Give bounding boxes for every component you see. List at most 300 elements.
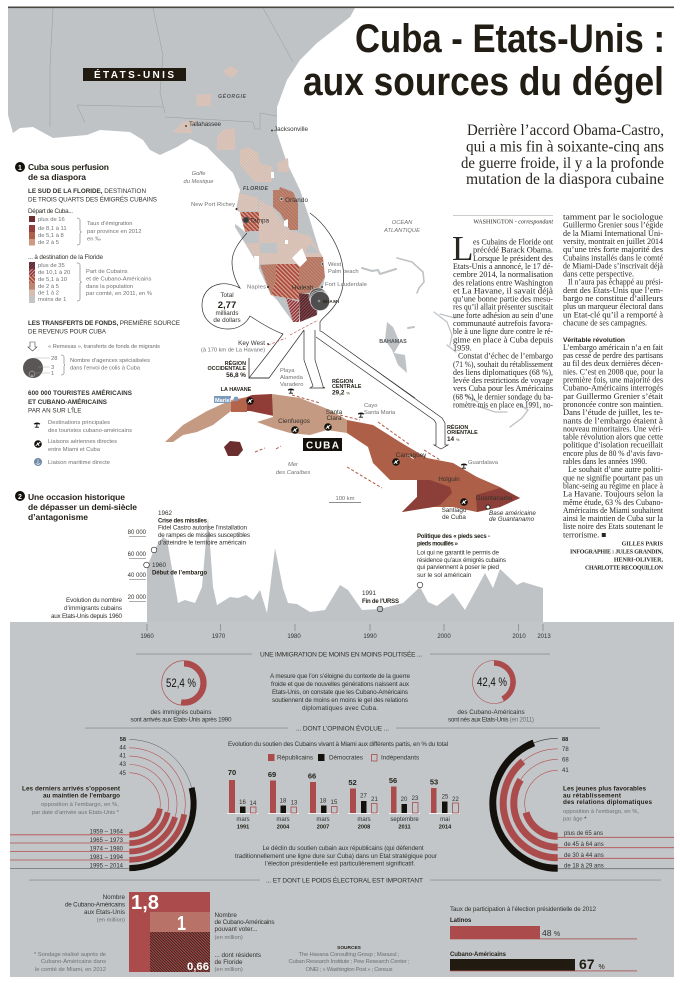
legend: tourism icons: des touristes cubano-américains [48, 428, 132, 434]
map: United States and Florida [8, 8, 355, 322]
footnote: le comté de Miami, en 2012 [35, 967, 106, 973]
donut chart: 52,4 %: 52,4 % [166, 678, 196, 690]
proportional circles legend: 1 [51, 371, 54, 377]
drop cap: L [452, 229, 473, 268]
donut chart: 42,4 %: des Cubano-Américains [457, 709, 525, 716]
chart caption [51, 597, 122, 620]
period labels: 1974 – 1980 [90, 846, 124, 852]
map labels: north Florida: New Port Richey [191, 202, 235, 208]
map dots and labels: south Florida [213, 219, 420, 345]
heading 2: de dépasser un demi-siècle [28, 502, 137, 512]
article: first column: vers Cuba pour les Américains [453, 384, 553, 393]
annotation: 1960: Début de l’embargo [152, 570, 207, 576]
article: second column: que ne signifie pourtant pas un [563, 473, 664, 482]
Cuba city labels, airports and ports: de Guantanamo [489, 516, 535, 523]
sub heading: transfers: LES TRANSFERTS DE FONDS, PREMIÈRE SOURCE [28, 318, 180, 327]
article: second column: Américains de Miami souhaitent [563, 506, 664, 515]
x axis labels: 2010 [512, 634, 526, 640]
labels right: de Floride [214, 959, 243, 966]
value labels: 78 [562, 747, 569, 753]
article: second column: HENRI-OLIVIER, [614, 558, 663, 564]
group: mars 2008: 52 [348, 778, 357, 787]
Cuba city labels, airports and ports: Holguin [438, 476, 460, 483]
article: first column: levée des restrictions de voyage [453, 376, 553, 385]
map dots and labels: south Florida: Fort Lauderdale [325, 282, 367, 288]
group: mars 2007: mars [316, 817, 330, 823]
group: mars 2007: 15 [331, 800, 338, 806]
legend: tourism icons: entre Miami et Cuba [48, 447, 101, 453]
group: mai 2014: 25 [442, 794, 449, 800]
chart caption: aux Etats-Unis depuis 1960 [51, 613, 122, 620]
sub heading: transfers [28, 318, 180, 336]
heading 2: d’antagonisme [28, 512, 88, 522]
label: CUBA [303, 438, 342, 452]
sub heading: Floride [28, 188, 157, 204]
text: immigration paragraph: froide et que de nouvelles générations naissent aux [271, 681, 410, 688]
legend: tourism icons: Liaison maritime directe [48, 460, 110, 466]
chart caption: Evolution du nombre [66, 597, 122, 604]
chart title left: par date d’arrivée aux Etats-Unis * [32, 810, 120, 816]
Cuba city labels, airports and ports: Santiago [442, 507, 467, 514]
annotation: 1962: de rampes de missiles susceptibles [158, 532, 250, 539]
article: second column: première fois, une majorité des [563, 376, 663, 384]
annotation: 1991: Fin de l’URSS [362, 599, 399, 605]
proportional circles legend: Nombre d’agences spécialisées [70, 358, 150, 364]
legend: destination: de 10,1 à 20 [38, 270, 70, 276]
group: mars 2004: 69 [268, 770, 276, 779]
annotation: 1960 [144, 562, 207, 576]
article: first column: précédé Barack Obama. [473, 246, 553, 255]
x axis labels: 1960 [140, 634, 154, 640]
article: second column: terrorisme. ■ [563, 530, 606, 539]
map labels: north Florida: Orlando [285, 197, 308, 204]
y axis labels: 60 000 [128, 552, 147, 558]
group: septembre 2011: 20 [401, 797, 408, 803]
map labels: north Florida: Tampa [250, 218, 269, 224]
labels right: (en million) [214, 935, 243, 941]
provinces: centre [257, 394, 347, 435]
heading 2 [15, 491, 137, 522]
sub heading: Floride: DE TROIS QUARTS DES ÉMIGRÉS CUBAINS [28, 194, 157, 204]
legend: departure: de 2 à 5 [38, 240, 59, 246]
y axis labels: 80 000 [128, 530, 147, 536]
annotation: wet foot dry foot: Politique des « pieds secs - [417, 534, 490, 540]
Cuba city labels, airports and ports: Guantanamo [476, 495, 513, 502]
value labels: 58 [120, 737, 126, 743]
sub heading: tourists: ET CUBANO-AMÉRICAINS [28, 397, 107, 406]
bar chart: party support: Evolution du soutien des Cubains vivant à Miami aux différents partis, en % du total [228, 741, 448, 748]
province: Artemisa [231, 397, 247, 412]
Cuba city labels, airports and ports: de Cuba [442, 514, 466, 521]
y axis labels: 20 000 [128, 595, 147, 601]
x axis labels: 1980 [287, 634, 301, 640]
donut chart: 42,4 %: sont nés aux Etats-Unis (en 2011) [448, 716, 534, 724]
chart title right [563, 786, 652, 822]
map labels: north Florida: Golfe [192, 171, 206, 177]
article: second column: qu’une très forte majorité des [563, 245, 663, 254]
section header: opinion: ... DONT L’OPINION ÉVOLUE ... [296, 724, 389, 732]
article: second column: INFOGRAPHIE : JULES GRANDIN, [570, 550, 664, 556]
group: mars 2008: 21 [371, 797, 378, 803]
article: second column: par Guillermo Grenier s’était [563, 392, 664, 401]
bar chart: turnout: Taux de participation à l’élection présidentielle de 2012 [450, 906, 596, 913]
map: Cuba [165, 394, 520, 512]
map dots and labels: south Florida: Palm beach [328, 269, 359, 275]
chart caption: d’immigrants cubains [64, 605, 122, 612]
article: second column: bargo ne constitue d’ailleurs [563, 294, 663, 303]
article: second column: chacune de ses campagnes. [563, 318, 647, 327]
proportional circles legend [23, 355, 150, 378]
legend: departure: de 5,1 à 8 [38, 233, 64, 239]
map label: ÉTATS-UNIS: ÉTATS-UNIS [94, 68, 174, 81]
sub heading: Floride: LE SUD DE LA FLORIDE, DESTINATION [28, 188, 146, 195]
group: mars 2008: 27 [360, 794, 367, 800]
annotation: 1962 [151, 510, 250, 553]
subtitle: Derrière l’accord Obama-Castro, [467, 122, 664, 139]
arrow: Région centrale [304, 330, 325, 388]
Cuba city labels, airports and ports [201, 340, 536, 523]
Florida Keys [268, 320, 318, 345]
bar chart: turnout: Latinos [450, 918, 472, 924]
chart title left: opposition à l’embargo, en %, [41, 802, 119, 808]
labels left: de Cubano-Américains [65, 902, 125, 908]
heading 2: 2 [18, 494, 22, 501]
value labels [562, 737, 569, 774]
map: Bahamas islands [362, 258, 528, 427]
group: mars 1991: 14 [250, 801, 257, 807]
scale bar: 100 km [335, 496, 355, 502]
proportional circles legend: 3 [51, 365, 54, 371]
article: second column: Cubains installés dans le comté [563, 253, 663, 262]
group: septembre 2011 [389, 776, 419, 830]
article: first column: une forte adhésion au sein d’une [453, 311, 553, 320]
arc chart: embargo by arrival date [10, 737, 194, 870]
annotation: 1962: Fidel Castro autorise l’installation [158, 524, 247, 532]
Cuba city labels, airports and ports: (à 170 km de La Havane) [201, 348, 265, 354]
Cuba city labels, airports and ports: des Caraïbes [276, 470, 310, 476]
donut chart: 42,4 %: 42,4 % [477, 677, 507, 689]
Cuba city labels, airports and ports: Cayo [364, 403, 378, 409]
value labels: 45 [119, 771, 127, 777]
article: second column: Guillermo Grenier sous l’égide [563, 221, 663, 230]
subtitle: mutation de la diaspora cubaine [466, 171, 664, 188]
leader lines [10, 834, 129, 836]
annotation: 1962: 1962 [158, 510, 173, 517]
value labels: 88 [562, 737, 568, 743]
article: first column: gime en place à Cuba depuis [453, 335, 553, 344]
labels left [65, 894, 125, 924]
Cuba city labels, airports and ports: Base américaine [489, 510, 536, 517]
Cuba city labels, airports and ports: Clara [326, 415, 342, 422]
Cuba city labels, airports and ports: 14 % [447, 436, 460, 443]
annotation: 1960: 1960 [152, 562, 167, 569]
donut chart: 52,4 % [130, 661, 232, 724]
article: first column: Lorsque le président des [473, 254, 553, 263]
group: mars 2008: mars [357, 817, 371, 823]
chart title right: opposition à l’embargo, en %, [563, 809, 639, 815]
value labels: 43 [119, 762, 127, 768]
annotation: wet foot dry foot: Loi qui ne garantit le permis de [417, 550, 499, 556]
article: second column: nants de l’embargo étaient à [563, 416, 663, 425]
article: second column: rables dans les années 1990. [563, 457, 647, 466]
article: first column: (71 %), souhait du rétablissement [453, 360, 554, 369]
value labels: 41 [562, 768, 569, 774]
annotation: 1962: Crise des missiles [158, 518, 208, 524]
labels left: (en million) [97, 918, 125, 924]
labels left: Nombre [103, 894, 125, 901]
article: second column: dent des Etats-Unis que l’em- [563, 286, 663, 295]
x axis labels [140, 624, 551, 640]
article: first column: ble à une ligne dure contre le ré- [453, 327, 553, 336]
footnote: * Sondage réalisé auprès de [34, 952, 106, 958]
legend: destination: moins de 1 [38, 297, 66, 303]
group: mars 2004: mars [276, 817, 290, 823]
chart title right: par âge * [563, 816, 587, 822]
footnote: Cubano-Américains dans [41, 959, 106, 965]
group: mai 2014: 53 [430, 778, 438, 786]
sources: Cuban Research Institute ; Pew Research Center ; [288, 959, 410, 965]
article: second column: L’embargo américain n’a en fait [563, 343, 664, 352]
article: second column: Le souhait d’une autre politi- [568, 465, 663, 474]
bar chart: turnout [450, 906, 637, 972]
group: mars 2007: 66 [308, 772, 316, 780]
x axis labels: 2000 [437, 634, 451, 640]
legend: departure: de 8,1 à 11 [38, 226, 67, 232]
article: second column: blanc-seing au régime en place à [563, 481, 663, 490]
article: second column: La Havane. Toujours selon la [563, 490, 663, 499]
article: first column: communauté autrefois favora- [453, 319, 553, 328]
sources: SOURCES [337, 945, 362, 951]
map labels: north Florida: du Mexique [184, 179, 214, 185]
text: immigration paragraph: Etats-Unis, on constate que les Cubano-Américains [272, 689, 408, 696]
group: mars 2008 [348, 778, 378, 830]
article: second column: versity, montrait en juillet 2014 [563, 237, 664, 246]
legend: destination [28, 254, 152, 303]
province: Guantánamo [476, 488, 520, 512]
legend: destination: dans la population [86, 284, 133, 290]
annotation: wet foot dry foot: résidence qu’aux émigrés cubains [417, 557, 506, 564]
sub heading: tourists: PAR AN SUR L’ÎLE [28, 406, 81, 414]
heading 1: de sa diaspora [28, 172, 86, 182]
group: mars 2007: 2007 [317, 824, 329, 830]
map labels: north Florida: FLORIDE [243, 186, 269, 192]
legend: departure [28, 208, 141, 246]
legend: destination: Part de Cubains [86, 269, 128, 275]
legend: destination: et de Cubano-Américains [86, 276, 152, 282]
legend: Républicains [277, 754, 313, 762]
map dots and labels: south Florida: milliards [215, 310, 239, 317]
panel: Cuba sous perfusion legend [15, 162, 180, 466]
bar chart: turnout: Cubano-Américains [450, 952, 507, 958]
article: second column: encore plus de 80 % d’avis favo- [563, 449, 663, 458]
arc chart: embargo by age [493, 737, 674, 870]
area chart: Cuban immigrants [51, 510, 551, 640]
y axis labels: 40 000 [128, 573, 147, 579]
legend: departure: Départ de Cuba... [28, 208, 73, 215]
group: mai 2014: mai [440, 817, 450, 823]
baselines [227, 812, 460, 814]
article: second column: ainsi le maintien de Cuba sur la [563, 514, 663, 523]
group: mars 2004: 13 [291, 800, 298, 806]
y axis labels [128, 530, 147, 602]
Cuba city labels, airports and ports: Mariel [215, 398, 232, 404]
annotation: 1991: 1991 [362, 590, 377, 597]
text: immigration paragraph: diplomatiques avec Cuba. [302, 705, 378, 712]
legend: tourism icons: Destinations principales [48, 420, 110, 426]
article: second column: dans cette perspective. [563, 270, 634, 279]
age labels: plus de 65 ans [564, 831, 603, 837]
article: second column: tamment par le sociologue [563, 212, 663, 222]
chart title right: Les jeunes plus favorables [563, 786, 646, 792]
map dots and labels: south Florida: MIAMI [323, 299, 339, 304]
legend: departure: Taux d’émigration [87, 221, 132, 227]
article: first column: des relations entre Washington [453, 278, 554, 287]
nested squares chart: voters: 0,66 [187, 961, 209, 973]
article: first column: Etats-Unis a annoncé, le 17 dé- [453, 262, 553, 271]
group: septembre 2011: 56 [389, 776, 397, 785]
period labels [90, 830, 124, 870]
map dots and labels: south Florida: OCÉAN [392, 219, 413, 226]
sources [288, 945, 410, 973]
group: mars 1991: 16 [239, 800, 246, 806]
map dots and labels: south Florida: Total [220, 292, 234, 299]
Isla de la Juventud [224, 441, 243, 456]
legend: Démocrates [329, 754, 363, 762]
group: mars 1991: 70 [228, 768, 236, 777]
byline: GILLES PARIS [622, 542, 664, 548]
top rule [8, 6, 674, 8]
arrow: Région occidentale [249, 358, 269, 378]
text: republican decline: Le déclin du soutien cubain aux républicains (qui défendent [262, 845, 424, 852]
Georgia and Florida emigration counties [173, 66, 325, 322]
text: republican decline: l’élection présidentielle est particulièrement significatif. [265, 860, 415, 868]
text: immigration paragraph [270, 673, 410, 712]
article: first column: et La Havane, il savait déjà [453, 286, 553, 295]
map dots and labels: south Florida: BAHAMAS [379, 339, 407, 345]
group: mars 2007: 18 [320, 798, 327, 804]
group: mars 1991: 1991 [237, 824, 249, 830]
legend: destination: plus de 35 [38, 263, 65, 269]
period labels: 1959 – 1964 [90, 830, 124, 836]
heading 1: Cuba sous perfusion [28, 162, 109, 172]
map dots and labels: south Florida: 2,77 [218, 300, 236, 311]
chart title left: au maintien de l’embargo [43, 792, 120, 800]
heading 1: 1 [18, 165, 22, 172]
leader lines [558, 837, 674, 858]
labels right: ... dont résidents [214, 952, 261, 959]
annotation: wet foot dry foot: pieds mouillés » [417, 542, 459, 548]
value labels: 68 [562, 758, 569, 764]
group: mars 1991: mars [236, 817, 250, 823]
Cuba city labels, airports and ports: RÉGION [332, 377, 353, 385]
map dots and labels: south Florida: Hialeah [292, 284, 314, 292]
annotation: 1962: d’atteindre le territoire américain [158, 540, 246, 546]
group: mars 2007 [308, 772, 338, 830]
legend: destination: de 5,1 à 10 [38, 277, 67, 283]
legend: departure: plus de 16 [38, 217, 65, 223]
labels left: aux Etats-Unis [84, 909, 125, 916]
legend: tourism icons [34, 420, 132, 466]
Cuba city labels, airports and ports: RÉGION [447, 423, 468, 431]
heading 1 [15, 162, 109, 182]
group: mai 2014: 22 [452, 797, 459, 803]
value labels: 44 [119, 746, 127, 752]
group: mars 2008: 2008 [358, 824, 370, 830]
group: septembre 2011: 2011 [398, 824, 411, 830]
bar chart: party support [227, 741, 460, 830]
provinces: east [347, 420, 520, 512]
x axis labels: 2013 [537, 634, 551, 640]
group: mars 1991 [228, 768, 257, 830]
Cuba city labels, airports and ports: 56,8 % [226, 372, 246, 379]
article: second column: Il n’aura pas échappé au prési- [568, 278, 663, 287]
article: first column: qu’une bonne partie des mesu- [453, 295, 553, 304]
group: mai 2014 [430, 778, 459, 830]
subtitle [461, 122, 664, 188]
title [303, 17, 665, 104]
article: first column: (68 %), le dernier sondage du ba- [453, 392, 553, 401]
legend: departure: en ‰ [87, 236, 101, 242]
Cuba city labels, airports and ports: RÉGION [225, 359, 246, 367]
Cuba city labels, airports and ports: Santa Maria [364, 410, 396, 416]
article: first column: Constat d’échec de l’embargo [458, 352, 553, 361]
map labels: north Florida: GÉORGIE [218, 92, 247, 100]
x axis labels: 1990 [363, 634, 377, 640]
Cuba city labels, airports and ports: CENTRALE [332, 384, 362, 390]
Cuba city labels, airports and ports: OCCIDENTALE [207, 366, 246, 372]
Cuba city labels, airports and ports: Guardalava [468, 460, 499, 466]
bar chart: turnout: 48 % [542, 928, 560, 938]
panel: Cuba sous perfusion legend: « Remesas », transferts de fonds de migrants [48, 344, 160, 350]
annotation: 1991 [362, 590, 399, 612]
article: second column: de Miami-Dade s’inscrivait déjà [563, 261, 663, 270]
map dots and labels: south Florida: de dollars [213, 317, 241, 324]
labels right: de Cubano-Américains [214, 919, 274, 926]
proportional circles legend: 28 [51, 356, 57, 362]
icon: remittance arrow [28, 342, 37, 351]
scale bar [329, 496, 361, 503]
period labels: 1995 – 2014 [90, 864, 124, 870]
age labels [564, 831, 604, 870]
value labels [119, 737, 127, 777]
Cuba city labels, airports and ports: Key West [238, 340, 265, 347]
legend: destination: ... à destination de la Floride [28, 254, 103, 261]
group: mars 2004: 18 [280, 798, 287, 804]
Cuba city labels, airports and ports: Camagüey [396, 452, 427, 459]
article: second column: Cubano-Américains interrogés [563, 384, 663, 393]
article: second column: au fil des deux dernières décen- [563, 359, 663, 368]
article: first column: cembre 2014, la normalisation [453, 270, 554, 279]
label: CUBA: CUBA [306, 440, 339, 452]
text: immigration paragraph: soutiennent de moins en moins le gel des relations [272, 697, 408, 704]
legend: tourism icons: Liaisons aériennes directes [48, 439, 117, 445]
annotation: wet foot dry foot [417, 534, 506, 588]
Cuba city labels, airports and ports: 29,2 % [332, 390, 350, 396]
annotation: wet foot dry foot: qui parviennent à poser le pied [417, 564, 499, 571]
article: first column [452, 215, 554, 410]
text: immigration paragraph: A mesure que l’on s’éloigne du contexte de la guerre [270, 673, 410, 680]
Cuba city labels, airports and ports: Mer [288, 462, 299, 468]
donut chart: 52,4 %: sont arrivés aux Etats-Unis après 1990 [130, 716, 232, 724]
age labels: de 30 à 44 ans [564, 853, 604, 859]
group: mai 2014: 2014 [439, 824, 452, 830]
Cuba city labels, airports and ports: Varadero [280, 382, 303, 388]
legend: destination: par comté, en 2011, en % [86, 291, 152, 297]
footnote [34, 952, 106, 973]
article: second column: politique d’isolation recueillait [563, 441, 664, 450]
nested squares chart: voters: 1 [177, 913, 186, 935]
x axis labels: 1970 [212, 634, 226, 640]
